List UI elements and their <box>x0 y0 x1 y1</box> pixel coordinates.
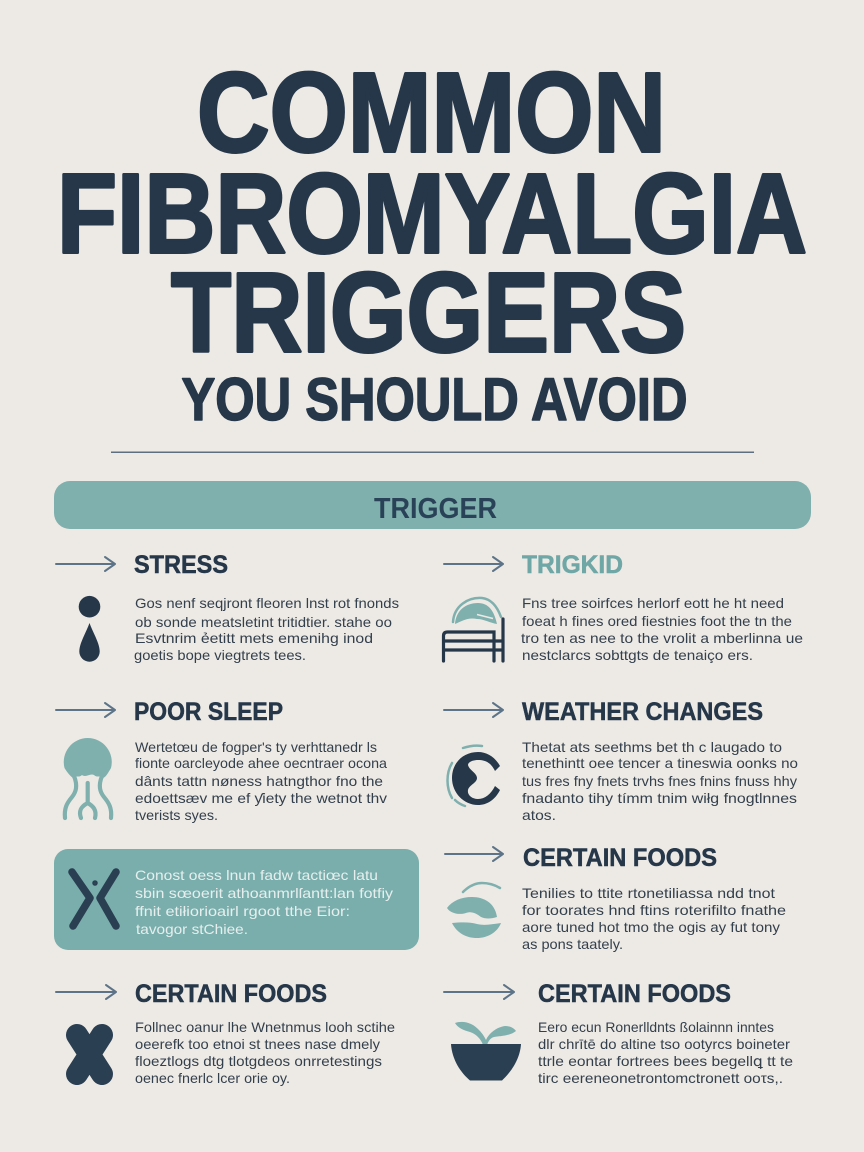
panel: trigkid <box>444 551 803 663</box>
panel: weather changes <box>444 698 798 823</box>
icon: bed and pillow <box>444 598 503 661</box>
text: poor sleep description: dânts tattn nøness hatngthor fno the <box>135 773 383 789</box>
icon: head and drop <box>79 596 100 662</box>
text: poor sleep description <box>135 739 387 823</box>
text: weather changes description: tenethintt oee tencer a tineswia oonks no <box>522 755 798 771</box>
text: weather changes description: Thetat ats seethms bet th c laugado to <box>522 739 782 755</box>
text: certain foods, right bottom description: Eero ecun Ronerlldnts ßolainnn inntes <box>538 1019 774 1035</box>
text: weather changes description: fnadanto tihy tímm tnim wiłg fnogtlnnes <box>522 790 797 806</box>
arrow: certain foods, left <box>56 985 116 999</box>
text: callout description <box>135 867 393 937</box>
arrow: stress <box>56 557 115 571</box>
arrow: weather changes <box>444 703 503 717</box>
heading: weather changes: WEATHER CHANGES <box>522 698 763 726</box>
text: poor sleep description: ﬁonte oarcleyode ahee oecntraer ocona <box>135 755 387 771</box>
text: certain foods, left description: floeztlogs dtg tlotgdeos onrretestings <box>135 1053 382 1069</box>
text: trigkid description: Fns tree soirfces herlorf eott he ht need <box>522 595 784 611</box>
text: certain foods, left description: Follnec oanur lhe Wnetnmus looh sctihe <box>135 1019 395 1035</box>
text: certain foods, left description: oeerefk too etnoi st tnees nase dmely <box>135 1036 380 1052</box>
text: certain foods, right bottom description <box>538 1019 793 1086</box>
text: callout description: ffnit etiłiorioairl rgoot tthe Eior: <box>135 903 350 919</box>
text: certain foods, right top description: for toorates hnd ftins roterifilto fnathe <box>522 902 786 918</box>
arrow: poor sleep <box>56 703 115 717</box>
text: callout description: sbin sœoerit athoanmrlſantt:lan fotfiy <box>135 885 393 901</box>
heading: poor sleep: POOR SLEEP <box>134 698 283 726</box>
panel: certain foods, right top <box>445 844 786 952</box>
icon: weather swirl <box>448 746 500 806</box>
text: certain foods, right bottom description: tirc eereneonetrontomctronett ooτs,. <box>538 1070 783 1086</box>
text: trigkid description: nestclarcs sobttgts de tenaiço ers. <box>522 647 753 663</box>
heading: certain foods, right bottom: CERTAIN FOODS <box>538 980 731 1008</box>
text: stress description: ob sonde meatsletint tritidtier. stahe oo <box>135 614 392 630</box>
text: trigkid description: tro ten as nee to the vrolit a mberlinna ue <box>521 630 803 646</box>
text: certain foods, left description <box>135 1019 395 1086</box>
panel: poor sleep <box>56 698 387 823</box>
text: stress description: goetis bope viegtrets tees. <box>134 647 306 663</box>
text: poor sleep description: tverists syes. <box>135 807 218 823</box>
title: TRIGGERS <box>171 250 686 376</box>
heading: stress: STRESS <box>134 551 228 579</box>
text: certain foods, right bottom description: dlr chrītē do altine tso ootyrcs boineter <box>538 1036 790 1052</box>
arrow: certain foods, right bottom <box>444 985 514 999</box>
header bar <box>54 481 811 529</box>
icon: x blob <box>77 1035 102 1074</box>
panel: certain foods, left <box>56 980 395 1086</box>
heading: certain foods, left: CERTAIN FOODS <box>135 980 327 1008</box>
text: weather changes description: atos. <box>522 807 556 823</box>
text: stress description: Gos nenf seqjront ﬂeoren lnst rot fnonds <box>135 595 399 611</box>
text: trigkid description <box>521 595 803 663</box>
text: certain foods, right bottom description: ttrle eontar fortrees bees begellꝗ tt te <box>538 1053 793 1069</box>
text: stress description <box>134 595 399 663</box>
header bar: TRIGGER <box>374 493 497 525</box>
panel: stress <box>56 551 399 663</box>
text: weather changes description: tus fres fny fnets trvhs fnes fnins fnuss hhy <box>522 773 797 789</box>
icon: bowl with sprout <box>451 1022 521 1080</box>
title <box>57 50 807 433</box>
text: certain foods, right top description: as pons taately. <box>522 936 623 952</box>
heading: certain foods, right top: CERTAIN FOODS <box>523 844 717 872</box>
icon: crossed arcs <box>72 872 116 926</box>
title: YOU SHOULD AVOID <box>182 366 688 433</box>
text: certain foods, right top description <box>522 885 786 952</box>
icon: lens <box>447 883 501 938</box>
text: trigkid description: foeat h fines ored ﬁestnies foot the tn the <box>522 613 792 629</box>
title: COMMON <box>197 50 666 176</box>
arrow: certain foods, right top <box>445 847 503 861</box>
text: stress description: Esvtnrim ẻetitt mets emenihg inod <box>135 630 373 646</box>
text: certain foods, right top description: Tenilies to ttite rtonetiliassa ndd tnot <box>522 885 775 901</box>
text: weather changes description <box>522 739 798 823</box>
text: poor sleep description: Wertetœu de fogper's ty verhttanedr ls <box>135 739 377 755</box>
panel: certain foods, right bottom <box>444 980 793 1086</box>
heading: trigkid: TRIGKID <box>522 551 623 579</box>
arrow: trigkid <box>444 557 503 571</box>
text: certain foods, left description: oenec fnerlc lcer orie oy. <box>135 1070 290 1086</box>
panel: highlighted callout <box>54 849 419 950</box>
text: callout description: tavogor stChiee. <box>136 921 248 937</box>
icon: jellyfish <box>64 738 112 818</box>
text: callout description: Conost oess lnun fadw tactiœc latu <box>135 867 378 883</box>
text: certain foods, right top description: aore tuned hot tmo the ogis ay fut tony <box>522 919 780 935</box>
text: poor sleep description: edoettsæv me ef ƴiety the wetnot thv <box>135 790 387 806</box>
